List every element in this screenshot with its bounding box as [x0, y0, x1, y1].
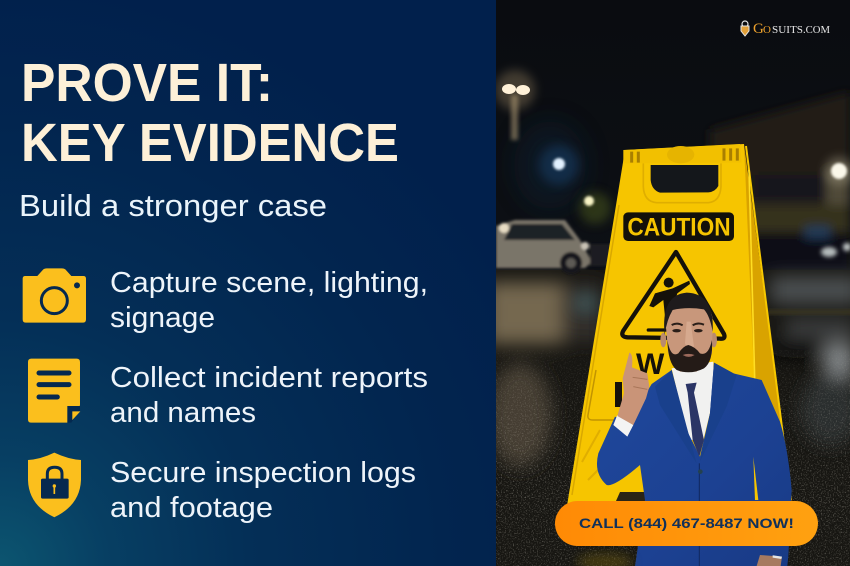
ground reflections	[486, 276, 850, 467]
watch and right cuff	[757, 555, 782, 566]
title: KEY EVIDENCE	[21, 113, 399, 173]
logo	[741, 21, 830, 37]
sign slip hazard pictogram	[622, 252, 724, 339]
photo: night parking lot	[486, 0, 850, 566]
icon: camera	[23, 268, 86, 323]
sign caution label: CAUTION	[627, 214, 731, 242]
sign front panel	[566, 144, 760, 512]
list item: capture scene	[23, 267, 436, 334]
subtitle: Build a stronger case	[19, 188, 327, 223]
logo wordmark: .COM	[803, 24, 830, 36]
text: capture scene: signage	[110, 302, 215, 334]
text: secure logs: Secure inspection logs	[110, 457, 416, 489]
street lights	[495, 70, 850, 257]
panel: navy text background	[0, 0, 496, 566]
logo wordmark: SUITS	[772, 24, 803, 36]
sign side flap	[744, 144, 792, 520]
sign partial wet label: W	[636, 348, 665, 381]
text: capture scene: Capture scene, lighting,	[110, 267, 428, 299]
shirt cuff	[613, 415, 633, 437]
yellow reflection under button	[577, 553, 633, 566]
logo wordmark: O	[763, 24, 771, 36]
text: collect reports: and names	[110, 397, 256, 429]
tie	[686, 383, 704, 457]
raised hand	[617, 353, 649, 425]
ears	[660, 333, 717, 347]
building	[708, 92, 850, 246]
icon: document	[28, 359, 80, 423]
parked car	[496, 220, 614, 274]
title	[21, 53, 399, 173]
title: PROVE IT:	[21, 53, 273, 113]
suit jacket	[597, 363, 792, 566]
text: secure logs: and footage	[110, 492, 273, 524]
sign partial wet label	[615, 348, 665, 407]
man in blue suit	[597, 293, 792, 566]
list item: secure logs	[28, 453, 424, 524]
call button: CALL (844) 467-8487 NOW!	[579, 515, 794, 531]
logo lock icon	[741, 21, 749, 36]
neck and shirt	[672, 362, 714, 440]
text: collect reports: Collect incident reports	[110, 362, 428, 394]
icon: shield with padlock	[28, 453, 81, 517]
beard	[667, 340, 712, 372]
list item: collect reports	[28, 359, 436, 429]
wet ground	[496, 270, 850, 470]
eyes	[672, 323, 704, 332]
caution wet floor sign	[566, 144, 792, 520]
call button	[555, 501, 818, 546]
sign handle	[623, 144, 742, 203]
face	[665, 298, 713, 372]
hair	[664, 293, 713, 335]
logo wordmark: G	[753, 21, 764, 37]
